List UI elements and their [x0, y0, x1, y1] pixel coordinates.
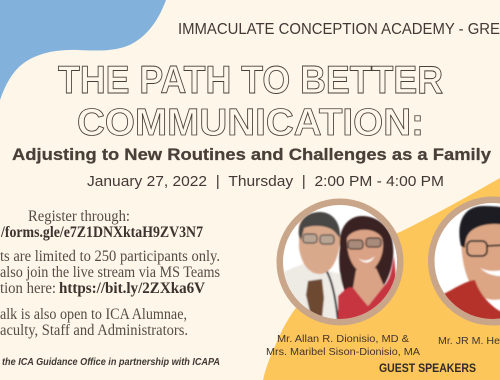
date and time: January 27, 2022 | Thursday | 2:00 PM - 4:00 PM: [87, 173, 444, 190]
title: THE PATH TO BETTER: [58, 58, 443, 101]
title: COMMUNICATION:: [77, 102, 424, 144]
registration details: [0, 208, 220, 339]
registration details: alk is also open to ICA Alumnae,: [0, 306, 187, 323]
speaker names: Dionisio couple: Mrs. Maribel Sison-Dionisio, MA: [266, 347, 420, 358]
registration details: /forms.gle/e7Z1DNXktaH9ZV3N7: [0, 224, 203, 241]
blue corner shape: [0, 0, 166, 100]
registration details: Register through:: [28, 208, 130, 225]
portrait: JR M. Ho: [428, 196, 500, 326]
registration details: https://bit.ly/2ZXka6V: [59, 280, 206, 297]
registration details: tion here:: [0, 280, 56, 297]
registration details: also join the live stream via MS Teams: [0, 264, 220, 281]
title: [58, 58, 443, 144]
speaker name: JR M. Ho: Mr. JR M. He: [438, 336, 500, 347]
speaker names: Dionisio couple: [266, 334, 420, 358]
subtitle: Adjusting to New Routines and Challenges as a Family: [12, 145, 492, 164]
registration details: aculty, Staff and Administrators.: [0, 322, 188, 339]
guest speakers label: GUEST SPEAKERS: [379, 363, 476, 375]
portrait: Allan and Maribel Dionisio: [276, 198, 404, 326]
organiser credit: the ICA Guidance Office in partnership with ICAPA: [2, 357, 220, 368]
speaker names: Dionisio couple: Mr. Allan R. Dionisio, MD &: [277, 334, 409, 345]
registration details: ts are limited to 250 participants only.: [0, 248, 220, 265]
yellow corner shape: [263, 178, 500, 380]
